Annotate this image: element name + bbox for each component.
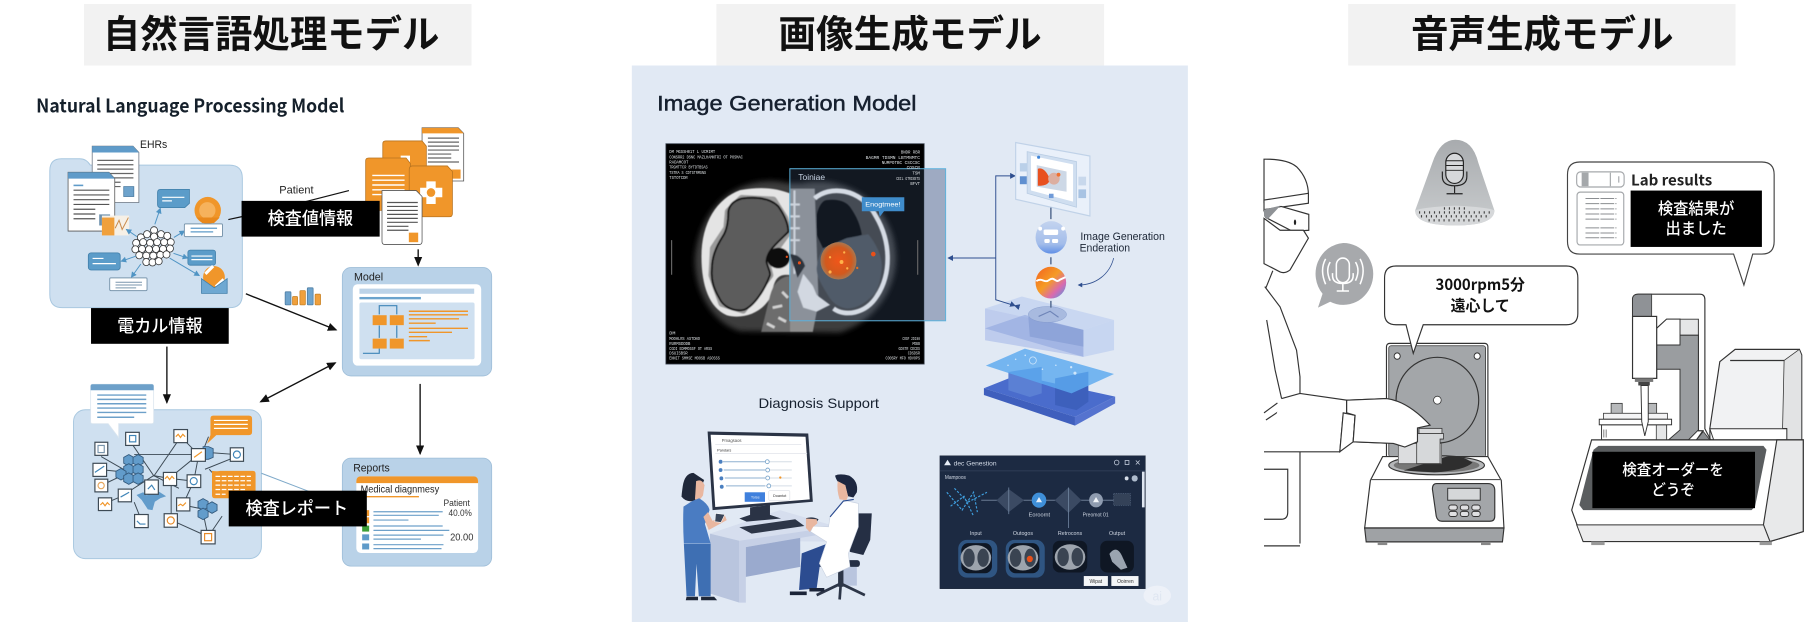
knowledge network panel bbox=[74, 384, 261, 559]
scan metadata top right: BFVT bbox=[910, 182, 920, 187]
scan metadata bottom left: DM bbox=[669, 332, 676, 337]
monitor: Doantot bbox=[773, 493, 787, 498]
scan metadata bottom right: MSB bbox=[912, 342, 920, 347]
scan metadata top right bbox=[866, 151, 920, 187]
scan metadata top left: CONSRR2 DSNC MAZLHAMNTRI OT POSMAC bbox=[669, 155, 743, 160]
overlay label: Toiniae bbox=[798, 173, 825, 182]
scan metadata top right: TSM bbox=[912, 171, 920, 176]
generation software window: Output bbox=[1109, 531, 1126, 537]
report icon bbox=[1577, 192, 1624, 245]
title: 画像生成モデル bbox=[716, 4, 1104, 66]
reports panel bbox=[342, 458, 492, 566]
speech bubble: 3000rpm5分 遠心して bbox=[1385, 266, 1578, 353]
label: 検査結果が出ました: 検査結果が bbox=[1658, 197, 1735, 219]
generated image card bbox=[1016, 143, 1090, 216]
hex clusters bbox=[116, 447, 217, 520]
panel: voice generation model bbox=[1264, 4, 1803, 546]
callout: Enogtmee bbox=[862, 197, 904, 217]
scan metadata top left: DM MGSSH01T L UCMIMT bbox=[669, 150, 716, 155]
body bbox=[1365, 457, 1504, 528]
layered 3D stack bbox=[984, 297, 1115, 426]
rainbow sphere bbox=[1036, 267, 1066, 299]
model panel: Model bbox=[354, 272, 383, 284]
neural network cluster bbox=[132, 227, 174, 266]
reports panel: Reports bbox=[353, 463, 390, 475]
torso glow bbox=[695, 181, 896, 333]
panel: image generation model bbox=[632, 4, 1188, 622]
callout: Enogtmee: Enogtmee! bbox=[865, 201, 901, 208]
illustration: diagnosis scene bbox=[682, 432, 872, 603]
label: 検査レポート bbox=[229, 491, 367, 526]
touch screen with text: 検査オーダーを bbox=[1622, 459, 1724, 480]
generation software window: Mampoos bbox=[945, 475, 966, 481]
label: 検査値情報 bbox=[242, 201, 380, 237]
scan metadata bottom left: MOOHLRS ASTDNO bbox=[669, 337, 700, 342]
network links bbox=[100, 437, 237, 537]
label: 検査レポート: 検査レポート bbox=[245, 494, 348, 520]
label: Image Generation Enderation: Image Generation bbox=[1080, 231, 1165, 243]
nurse bbox=[682, 473, 727, 600]
orange message bubbles bbox=[207, 416, 256, 498]
icon: smart speaker bbox=[1415, 140, 1494, 225]
title: 音声生成モデル: 音声生成モデル bbox=[1411, 4, 1673, 59]
EHR panel bbox=[50, 139, 242, 308]
scan metadata top left: RADAMCOT bbox=[669, 161, 689, 166]
scan metadata bottom left: ENNIT SMMSE MOOSB ASOSSS bbox=[669, 357, 720, 362]
scan metadata bottom right: COSF 2D198 bbox=[902, 337, 920, 342]
scan metadata bottom right: CDSDSR bbox=[908, 351, 920, 357]
encoder sphere bbox=[1036, 221, 1067, 254]
network node icons bbox=[93, 430, 244, 544]
scan metadata bottom right bbox=[886, 337, 920, 361]
label: EHRs: EHRs bbox=[140, 139, 167, 151]
scan metadata top right: COSCR bbox=[907, 166, 920, 171]
title: 画像生成モデル: 画像生成モデル bbox=[778, 4, 1042, 59]
control panel bbox=[1432, 484, 1495, 521]
scan metadata top right: NUMPOTBC CSCCSC bbox=[882, 161, 920, 166]
speech bubble: 3000rpm5分 遠心して: 遠心して bbox=[1451, 294, 1510, 316]
scan metadata bottom left: DSUISBSR bbox=[669, 351, 688, 357]
arrows bbox=[167, 249, 420, 454]
label: Lab results: Lab results bbox=[1631, 169, 1712, 190]
title: 音声生成モデル bbox=[1348, 4, 1735, 66]
neural image bbox=[947, 488, 987, 516]
speech bubble: lab results bbox=[1567, 162, 1774, 285]
sample container bbox=[1398, 428, 1443, 464]
reagent cabinet bbox=[1710, 349, 1802, 440]
pipette arm bbox=[1633, 294, 1711, 440]
scan metadata bottom left: RURMSDDDB bbox=[669, 342, 691, 347]
orange patient documents bbox=[366, 128, 464, 245]
base bbox=[1572, 440, 1803, 542]
illustration: centrifuge bbox=[1347, 343, 1504, 545]
watermark: ai: ai bbox=[1152, 589, 1162, 603]
generation software window: Input bbox=[970, 531, 982, 537]
monitor: Pmagsaos bbox=[722, 438, 742, 443]
touch screen with text bbox=[1579, 446, 1766, 510]
generation software window: Retrocons bbox=[1058, 531, 1082, 537]
scan metadata bottom right: GDSTR CDCDS bbox=[899, 347, 920, 352]
label: 電カル情報: 電カル情報 bbox=[117, 312, 203, 337]
scan metadata bottom left bbox=[669, 332, 720, 362]
panel background bbox=[632, 66, 1188, 622]
generation software window: Eoroornt bbox=[1029, 512, 1051, 519]
message icons bbox=[88, 189, 227, 293]
touch screen with text: どうぞ bbox=[1651, 479, 1695, 500]
illustration: analyzer bbox=[1572, 294, 1803, 545]
label: Image Generation Enderation bbox=[1080, 231, 1165, 254]
connector from patient documents bbox=[228, 191, 349, 220]
monitor: Pandars bbox=[717, 447, 731, 452]
reports panel: Patient bbox=[443, 498, 470, 508]
label: 検査結果が出ました bbox=[1631, 191, 1762, 247]
model panel bbox=[342, 268, 492, 376]
illustration: lab technician bbox=[1264, 159, 1430, 546]
flow diagram bbox=[363, 306, 404, 353]
monitor bbox=[708, 432, 813, 522]
label: 電カル情報 bbox=[91, 308, 229, 344]
sample rack bbox=[1602, 425, 1667, 440]
title: 自然言語処理モデル: 自然言語処理モデル bbox=[103, 3, 439, 59]
connector to reports bbox=[261, 473, 311, 492]
scan metadata top right: CEIL GTRINSTS bbox=[896, 177, 920, 182]
reports panel: 20.00 bbox=[450, 533, 474, 544]
speech bubble: 3000rpm5分 遠心して: 3000rpm5分 bbox=[1436, 273, 1525, 295]
mini bar chart icon bbox=[285, 288, 321, 305]
panel: natural language processing model bbox=[36, 3, 492, 566]
speech bubble bbox=[91, 384, 154, 437]
scan metadata top left: TSTRA S CDTSTRMSNS bbox=[669, 171, 706, 176]
scan overlay bbox=[790, 169, 924, 321]
document back bbox=[92, 146, 139, 202]
connector arrows bbox=[121, 208, 199, 277]
generation software window: dec Genestion bbox=[954, 460, 997, 467]
label: 検査値情報: 検査値情報 bbox=[268, 204, 353, 230]
label: Image Generation Enderation: Enderation bbox=[1080, 242, 1130, 254]
scan metadata top left: TSTOTCDR bbox=[669, 176, 688, 181]
icon: voice bubble bbox=[1316, 243, 1373, 308]
desk bbox=[710, 510, 855, 542]
tumor highlight bbox=[786, 242, 876, 279]
scan metadata top left: TRGMTTCR BYTDTBSAS bbox=[669, 166, 708, 171]
scan metadata top right: BNDR RBR bbox=[901, 151, 920, 156]
label: Patient: Patient bbox=[279, 184, 314, 196]
doctor bbox=[790, 474, 872, 599]
test strip icon bbox=[1577, 172, 1624, 187]
gloved hand bbox=[1347, 399, 1430, 447]
watermark: ai bbox=[1143, 586, 1171, 605]
blue map shape bbox=[137, 490, 166, 510]
reports panel: 40.0% bbox=[449, 508, 472, 518]
keyboard bbox=[739, 519, 804, 534]
scan metadata top right: BAGMR TDSMN LBTMNMTC bbox=[866, 156, 920, 161]
monitor: Tolse bbox=[751, 495, 760, 500]
generation software window bbox=[940, 456, 1145, 589]
subtitle: Natural Language Processing Model: Natural Language Processing Model bbox=[36, 93, 344, 119]
generation software window: Preomot 01 bbox=[1083, 512, 1109, 519]
torso anatomy bbox=[701, 188, 888, 332]
curved arrow bbox=[1078, 258, 1114, 285]
generation software window: Outogos bbox=[1013, 531, 1033, 537]
document front bbox=[68, 172, 129, 235]
label: Diagnosis Support: Diagnosis Support bbox=[758, 396, 879, 411]
scan metadata top left bbox=[669, 150, 743, 181]
CT scan image bbox=[666, 144, 946, 364]
scan metadata bottom left: CGDI EDMMOSSF OT ARSS bbox=[669, 347, 713, 352]
generation software window: Ooirren bbox=[1117, 579, 1134, 585]
connector arrows from generation stack bbox=[948, 176, 1015, 306]
label: 検査結果が出ました: 出ました bbox=[1665, 217, 1727, 239]
scan metadata bottom right: COOSRY MFO HDVOPS bbox=[886, 356, 920, 361]
lid bbox=[1386, 343, 1488, 461]
generation software window: Wipat bbox=[1090, 579, 1103, 585]
stack connectors bbox=[1049, 208, 1053, 308]
subtitle: Image Generation Model: Image Generation Model bbox=[657, 92, 917, 115]
reports panel: Medical diagnmesy bbox=[361, 484, 439, 495]
